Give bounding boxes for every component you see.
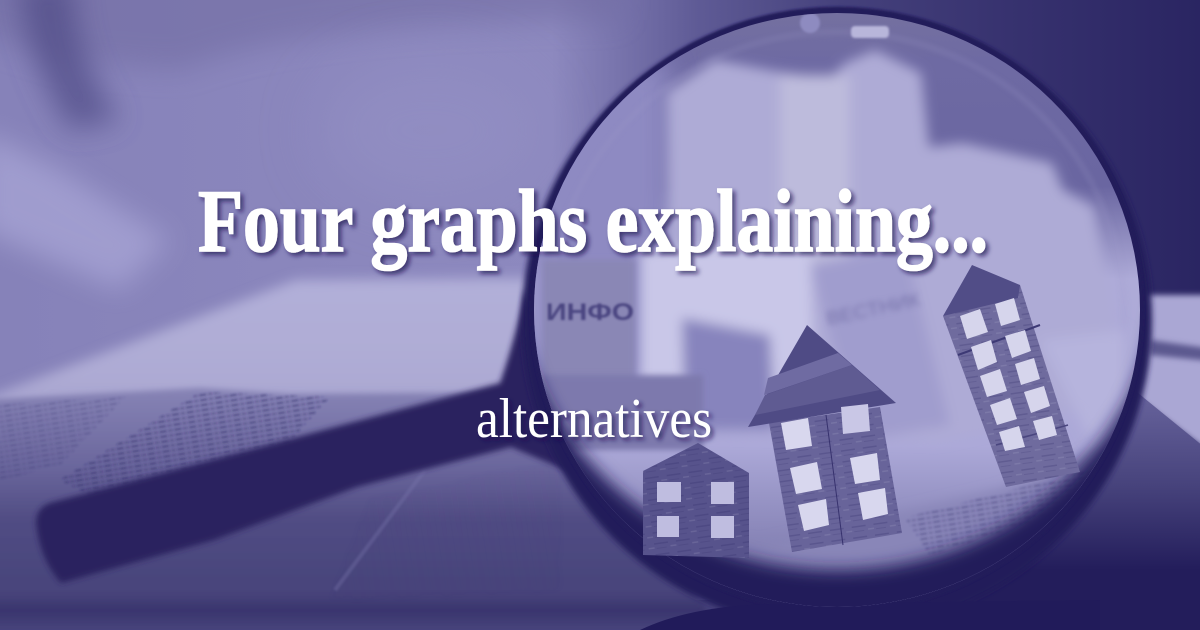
subtitle: alternatives — [476, 388, 712, 450]
right side paper behind the lens — [1100, 295, 1200, 460]
lens inner highlight ring — [550, 32, 1124, 592]
magnifying glass handle — [36, 290, 590, 583]
paper house: middle — [748, 325, 902, 552]
blurred newspaper column with print: ИНФО — [546, 299, 634, 326]
blurred paper buildings — [640, 50, 1125, 440]
magnifying glass rim — [522, 7, 1152, 630]
blurred newspaper column with print: ВЕСТНИК — [825, 289, 922, 329]
lens background — [534, 13, 1140, 607]
blurred newspaper column with print — [543, 260, 922, 450]
paper house: small — [643, 443, 749, 558]
open newspaper on the table — [0, 278, 1200, 630]
paper house: tall tower — [943, 265, 1080, 487]
light reflections — [800, 13, 889, 38]
view through the lens — [534, 13, 1140, 607]
newspaper surface inside lens — [629, 448, 1106, 607]
title: Four graphs explaining... — [198, 173, 988, 271]
dark crescent at the lens bottom — [536, 336, 1138, 607]
